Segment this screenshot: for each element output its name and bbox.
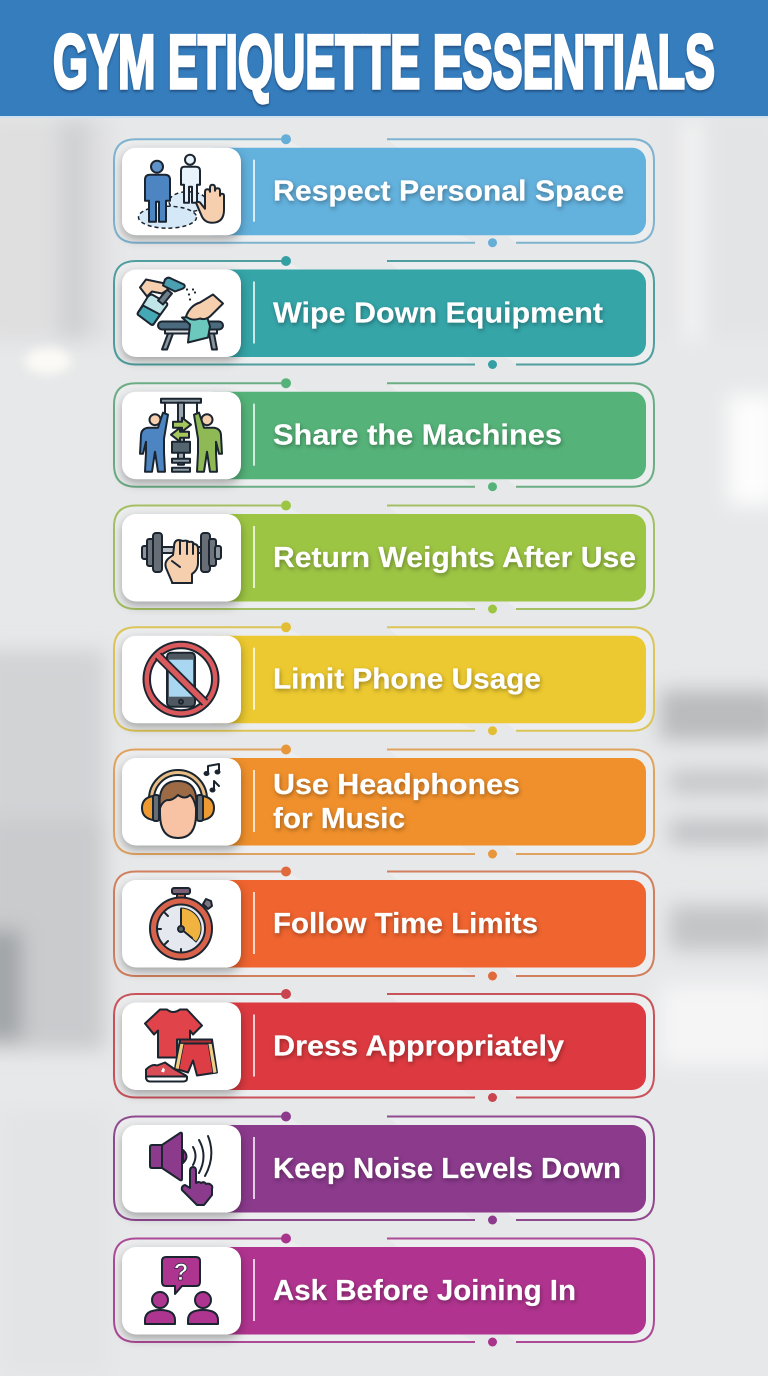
panel: share the machines <box>114 378 654 491</box>
label: Use Headphones <box>273 769 520 801</box>
label <box>273 769 520 835</box>
label: Limit Phone Usage <box>273 664 541 696</box>
panel: use headphones <box>114 744 654 858</box>
panel: wipe down equipment <box>114 256 654 369</box>
panel: respect personal space <box>114 134 654 247</box>
panel: limit phone usage <box>114 622 654 735</box>
panel: dress appropriately <box>114 989 654 1102</box>
label: for Music <box>273 803 405 835</box>
icon: stopwatch <box>122 880 241 968</box>
icon: sharing a machine <box>122 392 241 479</box>
panel: keep noise down <box>114 1112 654 1224</box>
label: Dress Appropriately <box>273 1030 564 1062</box>
icon: headphones <box>122 758 241 846</box>
icon: clothing <box>122 1002 241 1090</box>
panel: return weights <box>114 500 654 614</box>
label: Keep Noise Levels Down <box>273 1153 621 1185</box>
label: Share the Machines <box>273 420 562 452</box>
icon: spray and wipe <box>122 270 241 357</box>
title banner <box>0 0 768 118</box>
label: Follow Time Limits <box>273 908 538 940</box>
label: Return Weights After Use <box>273 542 636 574</box>
icon: two people asking: ? <box>174 1259 188 1286</box>
panel: ask before joining <box>114 1234 654 1346</box>
icon: speaker and hand <box>122 1125 241 1212</box>
icon: no phone <box>122 636 241 723</box>
icon: dumbbell in fist <box>122 514 241 602</box>
icon: personal space <box>122 148 241 235</box>
icon: two people asking <box>122 1247 241 1334</box>
panel: follow time limits <box>114 866 654 980</box>
label: Respect Personal Space <box>273 176 624 208</box>
label: Ask Before Joining In <box>273 1275 576 1307</box>
label: Wipe Down Equipment <box>273 298 603 330</box>
